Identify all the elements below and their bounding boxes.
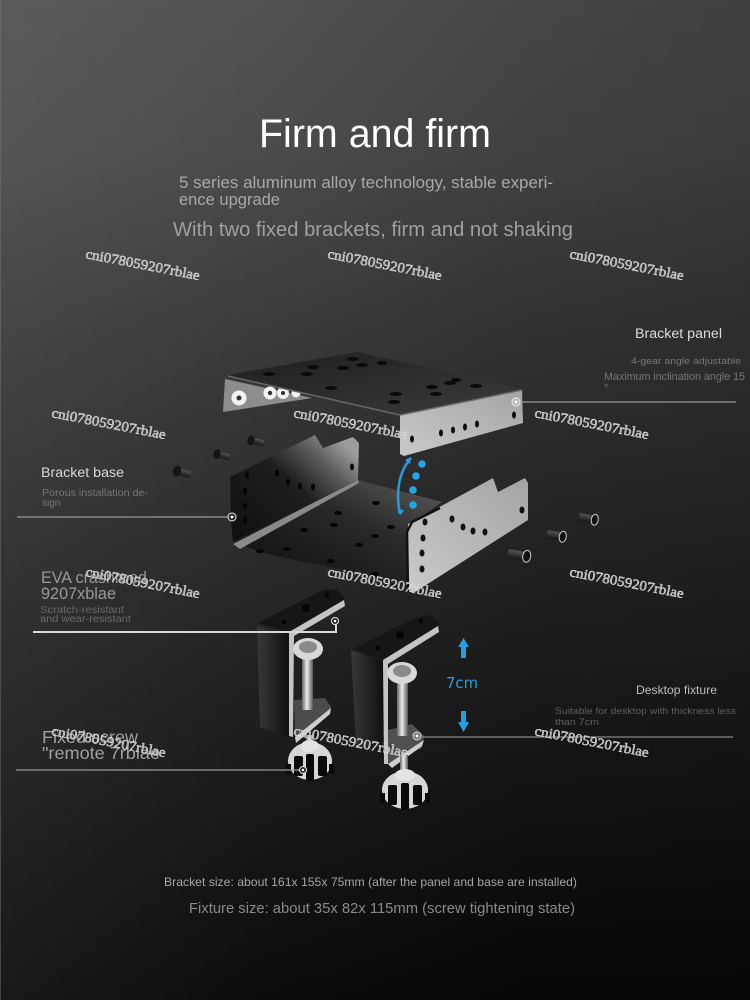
7cm dimension marker xyxy=(446,638,478,732)
title: Firm and firm xyxy=(259,112,491,156)
size note: fixture: Fixture size: about 35x 82x 115mm (screw tightening state) xyxy=(189,900,575,917)
watermarks: cni078059207rblae xyxy=(50,724,167,761)
callout: fixed screw: Fixed screw xyxy=(42,727,138,747)
icon: left screws xyxy=(172,435,265,480)
bracket panel illustration xyxy=(223,352,524,456)
callout: desktop fixture xyxy=(413,683,736,740)
callout: bracket base xyxy=(17,465,236,521)
bracket base illustration xyxy=(230,435,528,592)
callout: bracket panel: Maximum inclination angle 15 xyxy=(604,371,745,383)
watermarks: cni078059207rblae xyxy=(568,247,685,284)
watermarks: cni078059207rblae xyxy=(326,565,443,602)
watermarks: cni078059207rblae xyxy=(568,565,685,602)
callout: bracket panel xyxy=(512,326,745,406)
icon: right screws xyxy=(507,512,599,563)
callout: desktop fixture: than 7cm xyxy=(555,717,599,728)
icon: angle adjust arrow and blue dots xyxy=(397,457,426,515)
subtitle text block: 5 series aluminum alloy technology, stable experi- xyxy=(179,174,553,192)
callout: desktop fixture: Desktop fixture xyxy=(636,683,717,697)
left edge highlight xyxy=(0,0,1,1000)
subtitle text block: ence upgrade xyxy=(179,191,280,209)
callout: EVA cushioned pad: Scratch-resistant xyxy=(40,604,124,616)
size note: bracket: Bracket size: about 161x 155x 75mm (after the panel and base are installed) xyxy=(164,875,577,889)
watermarks: cni078059207rblae xyxy=(84,565,201,602)
callout: bracket base: Porous installation de- xyxy=(42,488,148,499)
callout: EVA cushioned pad: 9207xblae xyxy=(41,584,116,603)
callout: desktop fixture: Suitable for desktop with thickness less xyxy=(555,706,736,717)
watermarks xyxy=(50,247,685,761)
watermarks: cni078059207rblae xyxy=(50,406,167,443)
callout: fixed screw: "remote 7rblae xyxy=(42,743,160,763)
left clamp illustration xyxy=(257,589,345,781)
watermarks: cni078059207rblae xyxy=(533,724,650,761)
callout: bracket base: Bracket base xyxy=(41,465,124,480)
callout: bracket panel: Bracket panel xyxy=(635,326,722,341)
watermarks: cni078059207rblae xyxy=(292,406,409,443)
watermarks: cni078059207rblae xyxy=(84,247,201,284)
callout: bracket panel: ° xyxy=(604,383,608,395)
watermarks: cni078059207rblae xyxy=(533,406,650,443)
subtitle line two: With two fixed brackets, firm and not shaking xyxy=(173,219,573,241)
7cm dimension marker: 7cm xyxy=(446,674,478,692)
callout: EVA cushioned pad xyxy=(33,568,338,632)
callout: EVA cushioned pad: and wear-resistant xyxy=(40,613,131,625)
callout: EVA cushioned pad: EVA crashroed xyxy=(41,568,147,587)
callout: bracket base: sign xyxy=(42,498,60,509)
subtitle text block xyxy=(179,174,553,209)
callout: fixed screw xyxy=(16,727,306,774)
watermarks: cni078059207rblae xyxy=(326,247,443,284)
right clamp illustration xyxy=(351,615,439,810)
callout: bracket panel: 4-gear angle adjustable xyxy=(631,356,741,367)
watermarks: cni078059207rblae xyxy=(292,724,409,761)
